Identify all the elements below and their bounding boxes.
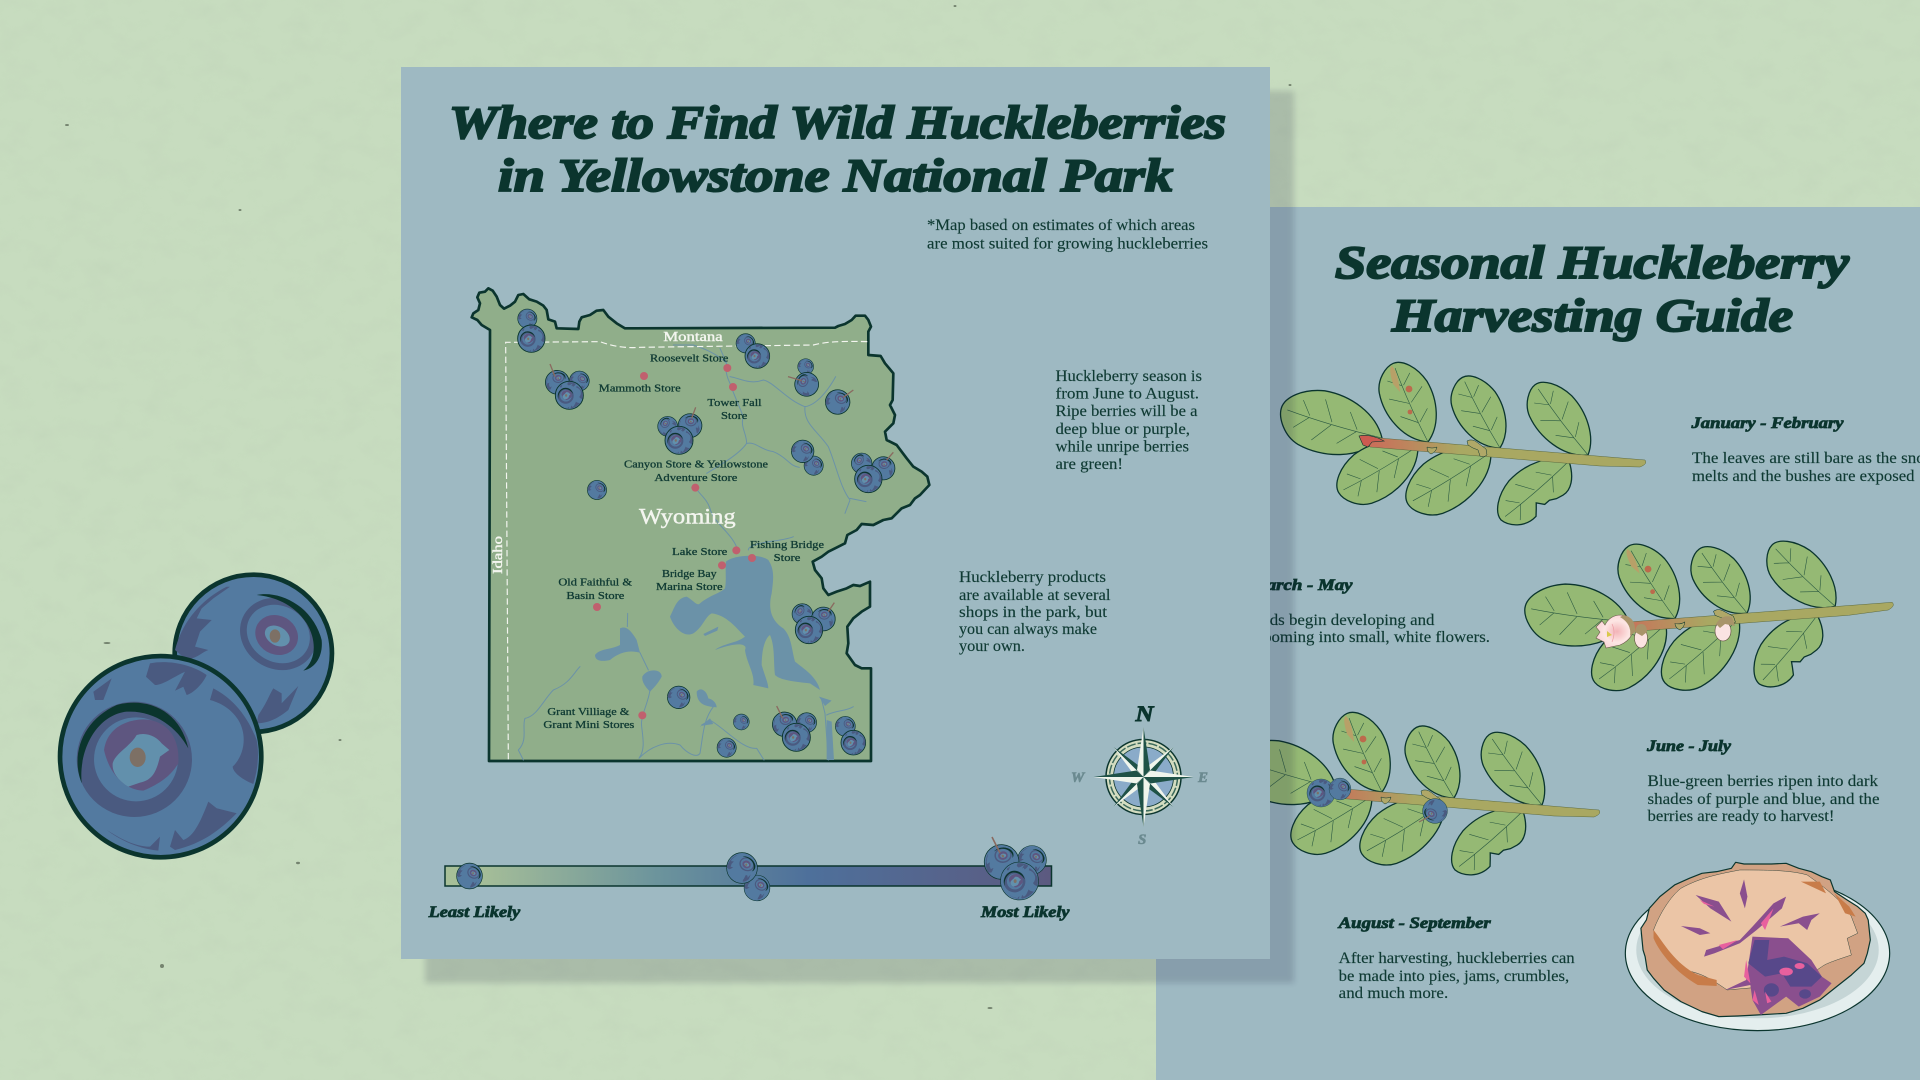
- berry single south: [667, 686, 690, 709]
- illustration: january branch: [1272, 354, 1646, 537]
- text: map footnote: are most suited for growing huckleberries: [927, 236, 1208, 252]
- berry pair southeast corner: [835, 716, 866, 755]
- text: june july: June - July: [1646, 738, 1732, 755]
- map: [472, 288, 929, 761]
- title: Where to Find Wild Huckleberries: [449, 97, 1226, 149]
- text: june july: Blue-green berries ripen into dark: [1648, 773, 1878, 790]
- legend labels: Most Likely: [980, 904, 1071, 921]
- text: season note: while unripe berries: [1056, 438, 1189, 456]
- text: january february: January - February: [1690, 415, 1845, 432]
- panel: map of yellowstone: [401, 67, 1270, 959]
- store labels: Grant Mini Stores: [543, 719, 634, 731]
- legend berries: medium: [727, 853, 770, 901]
- icon: flower bud one: [1634, 624, 1648, 648]
- state labels: Montana: [663, 329, 723, 344]
- store labels: Roosevelt Store: [650, 353, 728, 365]
- text: season note: Huckleberry season is: [1056, 368, 1202, 385]
- legend berries: most likely: [977, 837, 1046, 900]
- park outline: [472, 288, 929, 761]
- text: january february: The leaves are still bare as the snow: [1692, 450, 1920, 467]
- text: season note: deep blue or purple,: [1056, 421, 1190, 438]
- text: season note: Ripe berries will be a: [1056, 403, 1198, 420]
- legend berries: least likely: [457, 863, 482, 889]
- state border dashes: [506, 341, 868, 759]
- text: products note: are available at several: [959, 587, 1110, 604]
- store labels: Tower Fall: [707, 397, 762, 409]
- text: january february: melts and the bushes are exposed: [1692, 468, 1915, 485]
- text: products note: Huckleberry products: [959, 569, 1106, 586]
- berry cluster southeast: [792, 602, 840, 644]
- store markers: [593, 364, 756, 719]
- illustration: march branch with flowers: [1507, 497, 1905, 736]
- text: season note: from June to August.: [1056, 386, 1199, 402]
- text: products note: you can always make: [959, 621, 1097, 638]
- text: august september: be made into pies, jams, crumbles,: [1339, 968, 1569, 985]
- text: march may: March - May: [1249, 577, 1354, 594]
- text: january february: [1690, 415, 1920, 485]
- state labels: [490, 329, 736, 574]
- text: products note: your own.: [959, 638, 1025, 655]
- store labels: Basin Store: [566, 590, 624, 602]
- berry single northeast: [824, 388, 853, 416]
- panel shadow: [425, 91, 1294, 983]
- berry single south small: [733, 714, 749, 730]
- compass rose: E: [1197, 770, 1208, 786]
- berry single south bottom: [717, 738, 736, 757]
- illustration: huckleberry pie: [1625, 862, 1890, 1031]
- berry cluster northwest corner: [518, 309, 545, 352]
- store labels: Store: [774, 552, 800, 564]
- state labels: Wyoming: [639, 503, 736, 528]
- text: august september: and much more.: [1339, 985, 1448, 1002]
- berry cluster central: [658, 407, 707, 454]
- store labels: Mammoth Store: [599, 383, 681, 395]
- text: june july: [1646, 738, 1880, 825]
- store labels: Old Faithful &: [558, 577, 633, 589]
- heading: seasonal guide: Harvesting Guide: [1391, 290, 1793, 342]
- rivers: [518, 345, 866, 760]
- title: in Yellowstone National Park: [498, 150, 1174, 202]
- store labels: Marina Store: [656, 581, 723, 593]
- legend labels: [428, 904, 1071, 921]
- text: products note: shops in the park, but: [959, 604, 1108, 621]
- berry cluster roosevelt: [736, 334, 770, 368]
- store labels: [543, 353, 824, 731]
- store labels: Canyon Store & Yellowstone: [624, 459, 768, 471]
- store labels: Lake Store: [672, 546, 727, 558]
- berry cluster mammoth: [541, 364, 589, 409]
- berry cluster south: [767, 706, 817, 751]
- compass rose: W: [1071, 770, 1086, 786]
- text: march may: Buds begin developing and: [1250, 612, 1435, 629]
- icon: flower bud two: [1715, 616, 1735, 641]
- text: march may: [1249, 577, 1490, 646]
- text: june july: shades of purple and blue, and the: [1648, 791, 1880, 808]
- berry cluster far east: [851, 452, 900, 493]
- lakes: [595, 556, 834, 760]
- store labels: Fishing Bridge: [750, 539, 824, 551]
- berry pair east: [791, 440, 823, 475]
- heading: seasonal guide: Seasonal Huckleberry: [1335, 237, 1849, 289]
- compass rose: S: [1138, 832, 1146, 848]
- store labels: Store: [721, 410, 747, 422]
- store labels: Adventure Store: [654, 472, 737, 484]
- illustration: large blueberries: [60, 575, 332, 857]
- berry single west: [587, 480, 607, 500]
- illustration: june branch with berries: [1226, 704, 1600, 887]
- text: august september: After harvesting, huckleberries can: [1339, 950, 1575, 967]
- text: map footnote: [927, 217, 1208, 252]
- text: products note: [959, 569, 1110, 655]
- store labels: Grant Villiage &: [547, 706, 630, 718]
- legend gradient bar: [445, 866, 1052, 886]
- legend labels: Least Likely: [428, 904, 521, 921]
- store labels: Bridge Bay: [662, 568, 717, 580]
- legend: likelihood scale: [428, 837, 1071, 921]
- text: august september: [1338, 915, 1575, 1002]
- state labels: Idaho: [490, 536, 505, 574]
- title: [449, 97, 1226, 202]
- berry cluster northeast: [788, 359, 820, 398]
- text: august september: August - September: [1338, 915, 1492, 932]
- text: season note: are green!: [1056, 456, 1123, 473]
- panel: seasonal harvesting guide: [1156, 207, 1920, 1080]
- compass rose: [1071, 701, 1208, 848]
- text: season note: [1056, 368, 1202, 473]
- text: map footnote: *Map based on estimates of which areas: [927, 217, 1195, 234]
- compass rose: N: [1134, 701, 1155, 726]
- text: march may: blooming into small, white flowers.: [1250, 629, 1490, 646]
- icon: open flower: [1596, 615, 1635, 648]
- heading: seasonal guide: [1335, 237, 1849, 342]
- text: june july: berries are ready to harvest!: [1648, 808, 1834, 825]
